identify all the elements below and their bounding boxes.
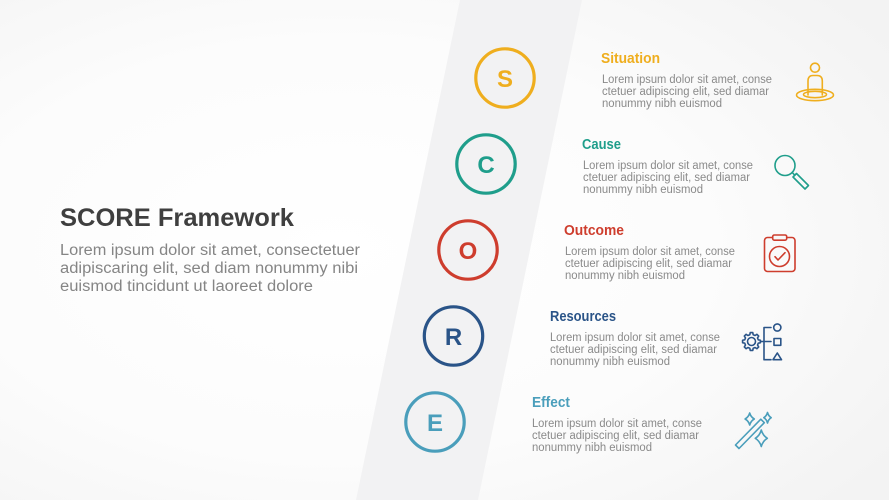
- text: resources: Lorem ipsum dolor sit amet, conse: [550, 332, 720, 344]
- text: resources: [550, 332, 720, 368]
- text: situation: ctetuer adipiscing elit, sed diamar: [602, 86, 769, 98]
- text: outcome: ctetuer adipiscing elit, sed diamar: [565, 258, 732, 270]
- heading: cause: Cause: [582, 137, 621, 153]
- panel: cause: [582, 137, 808, 196]
- icon: person on target: [796, 63, 834, 101]
- text: cause: [583, 160, 753, 196]
- circle: C: [457, 135, 515, 193]
- text: resources: ctetuer adipiscing elit, sed diamar: [550, 344, 717, 356]
- intro text: euismod tincidunt ut laoreet dolore: [60, 278, 313, 295]
- icon: clipboard check: [764, 235, 795, 272]
- text: outcome: [565, 246, 735, 282]
- circle: R: R: [445, 324, 462, 351]
- text: effect: [532, 418, 702, 454]
- text: effect: Lorem ipsum dolor sit amet, conse: [532, 418, 702, 430]
- intro text: Lorem ipsum dolor sit amet, consectetuer: [60, 242, 360, 259]
- intro text: adipiscaring elit, sed diam nonummy nibi: [60, 260, 358, 277]
- circle: E: [406, 393, 464, 451]
- intro text: [60, 242, 360, 295]
- text: outcome: Lorem ipsum dolor sit amet, conse: [565, 246, 735, 258]
- circle: E: E: [427, 410, 443, 437]
- circle: S: S: [497, 66, 513, 93]
- icon: magnifier: [775, 156, 808, 189]
- panel: outcome: [564, 223, 795, 282]
- text: cause: ctetuer adipiscing elit, sed diamar: [583, 172, 750, 184]
- text: effect: ctetuer adipiscing elit, sed diamar: [532, 430, 699, 442]
- icon: gear and shapes: [743, 324, 782, 360]
- text: situation: Lorem ipsum dolor sit amet, conse: [602, 74, 772, 86]
- heading: outcome: Outcome: [564, 223, 624, 239]
- circle: C: C: [477, 152, 495, 179]
- heading: resources: Resources: [550, 309, 616, 325]
- icon: magic wand: [736, 412, 771, 448]
- text: cause: nonummy nibh euismod: [583, 184, 703, 196]
- circle: S: [476, 49, 534, 107]
- heading: effect: Effect: [532, 395, 570, 411]
- text: situation: nonummy nibh euismod: [602, 98, 722, 110]
- title: SCORE Framework: [60, 204, 294, 232]
- panel: situation: [601, 51, 834, 110]
- text: effect: nonummy nibh euismod: [532, 442, 652, 454]
- heading: situation: Situation: [601, 51, 660, 67]
- panel: effect: [532, 395, 771, 454]
- text: outcome: nonummy nibh euismod: [565, 270, 685, 282]
- circle: O: O: [459, 238, 477, 265]
- circle: O: [439, 221, 497, 279]
- circle: R: [424, 307, 483, 365]
- text: cause: Lorem ipsum dolor sit amet, conse: [583, 160, 753, 172]
- diagonal band: [356, 0, 582, 500]
- text: situation: [602, 74, 772, 110]
- text: resources: nonummy nibh euismod: [550, 356, 670, 368]
- panel: resources: [550, 309, 782, 368]
